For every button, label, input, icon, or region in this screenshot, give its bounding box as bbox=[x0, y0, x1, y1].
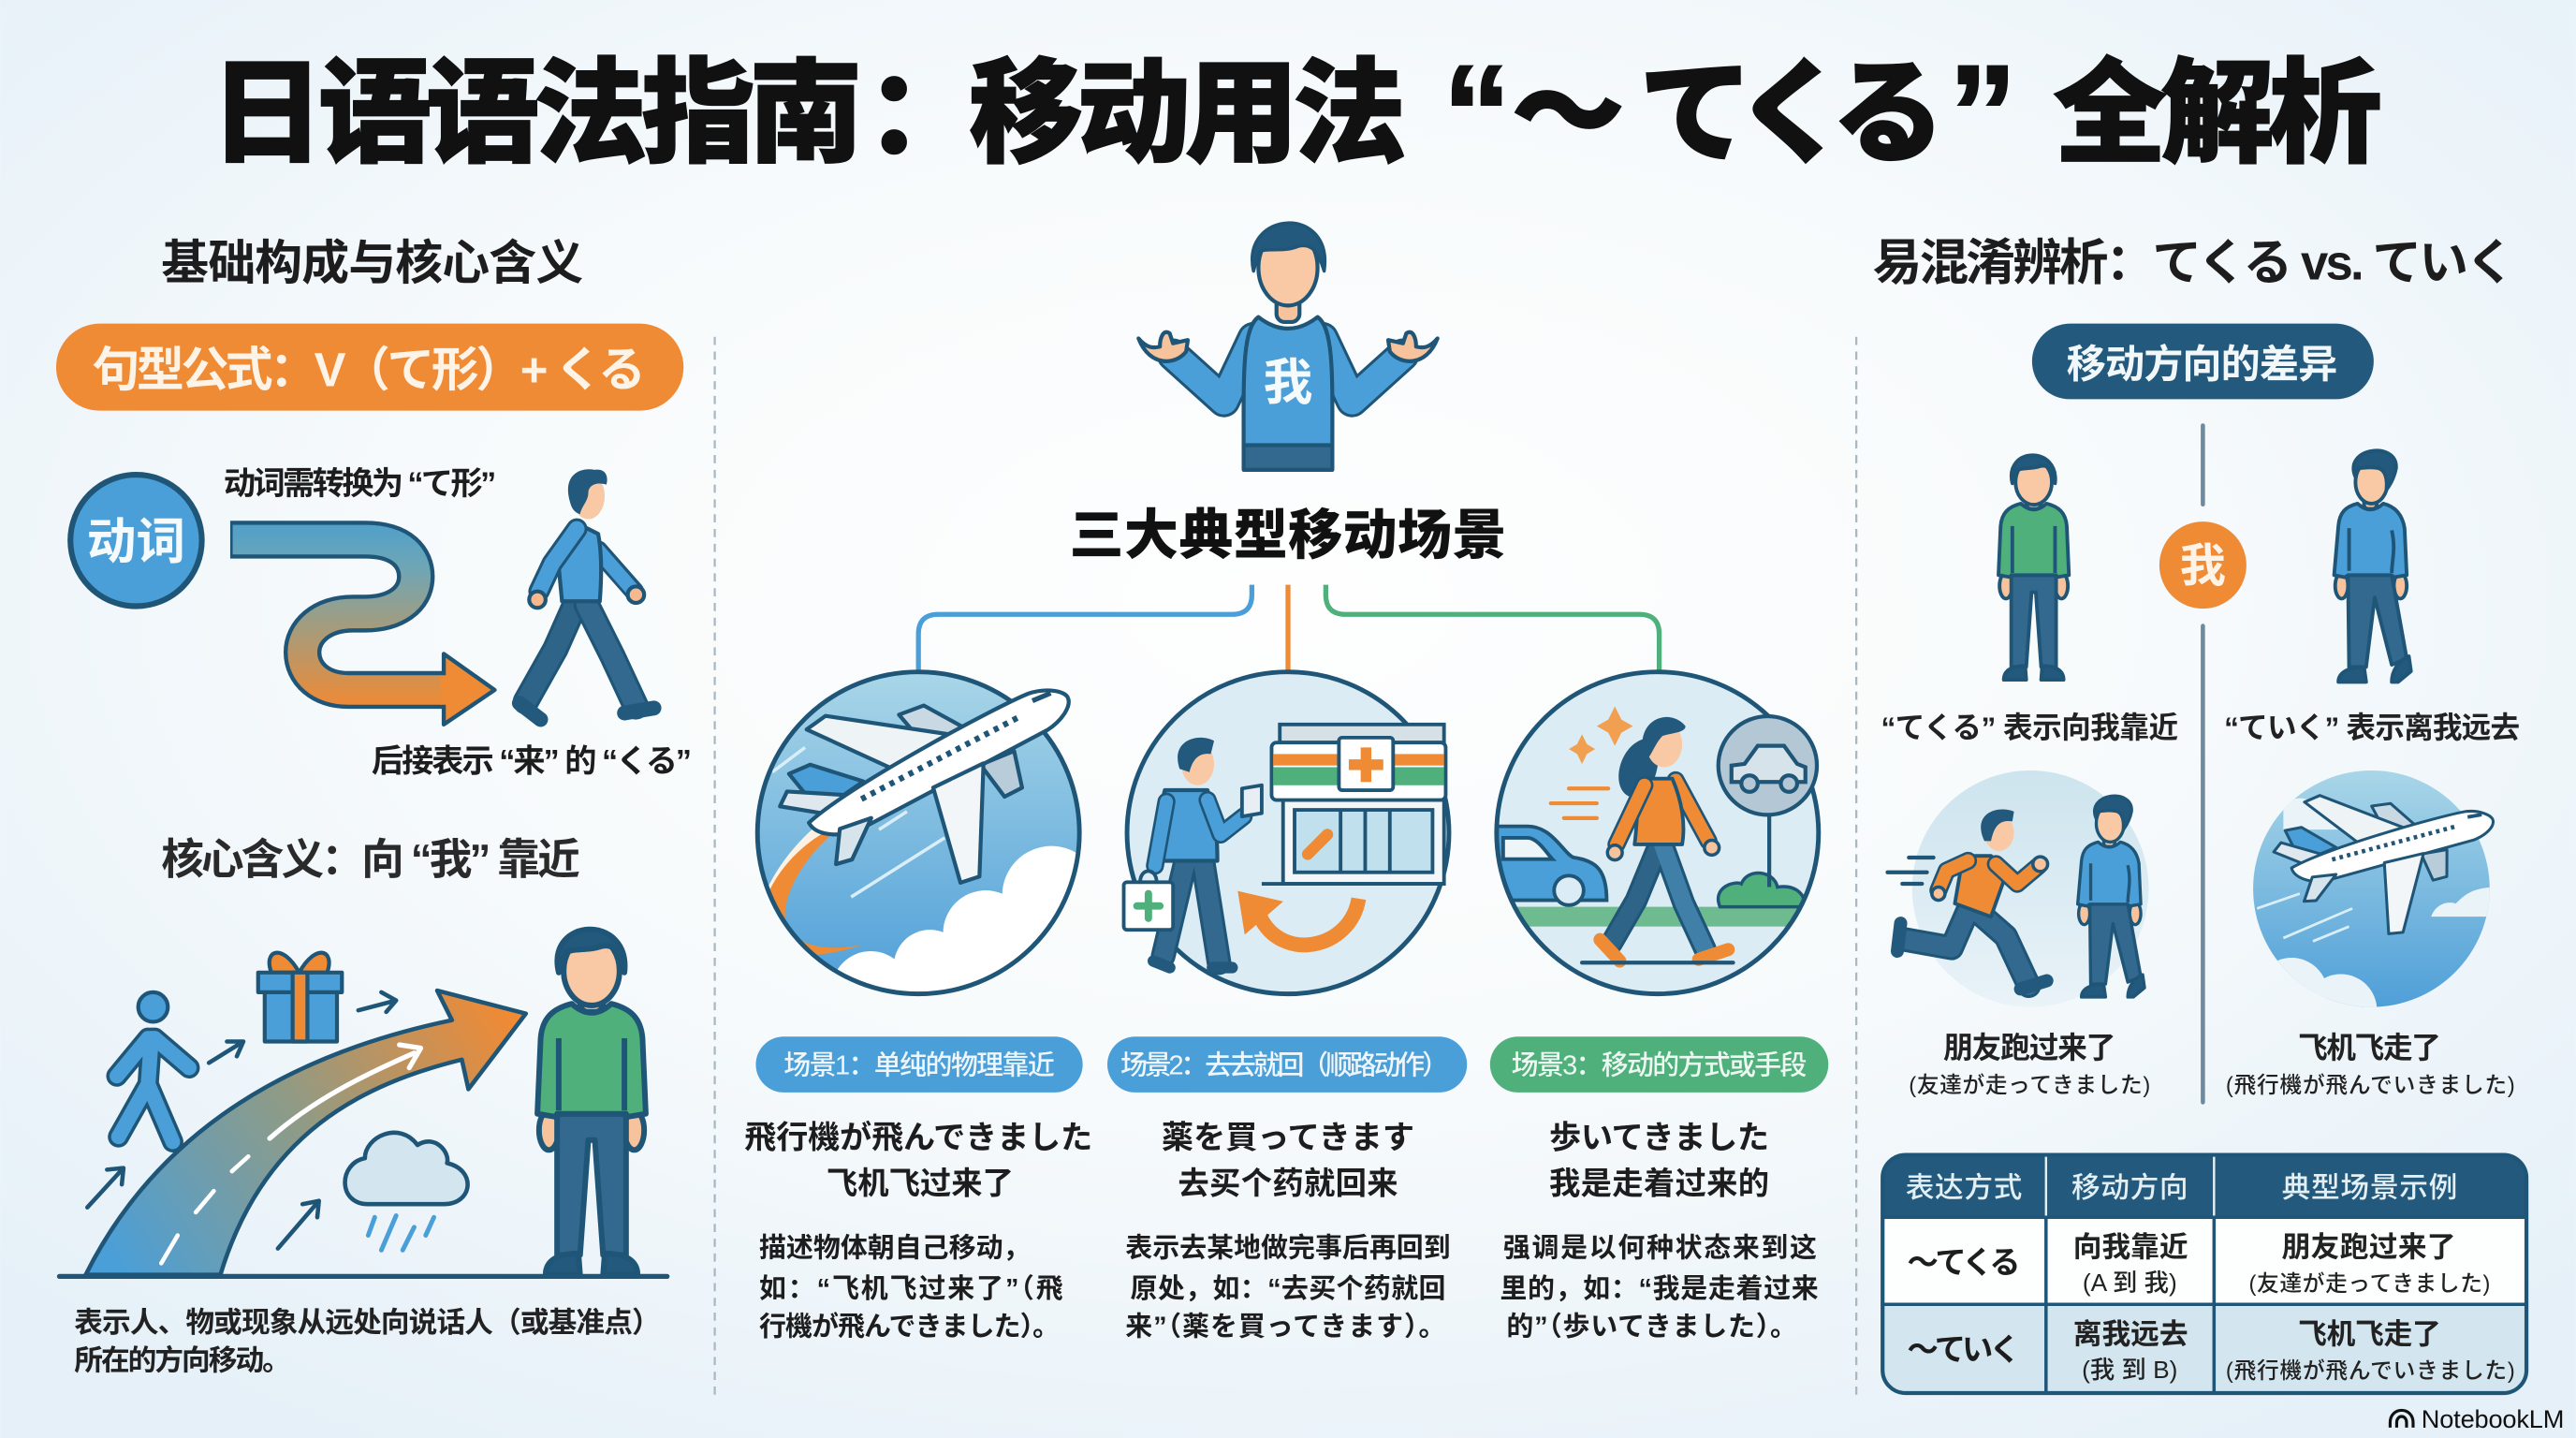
verb circle bbox=[70, 475, 202, 606]
store bbox=[1262, 725, 1445, 884]
friend running illustration bbox=[1887, 770, 2148, 1007]
panel: three scenes bbox=[744, 223, 1832, 1343]
label: followed by kuru: 后接表示 “来” 的 “くる” bbox=[372, 744, 692, 780]
scene 1 card bbox=[744, 1036, 1092, 1343]
scene 2 card: 场景2：去去就回（顺路动作） bbox=[1120, 1051, 1449, 1081]
man with phone and bag bbox=[1124, 738, 1262, 968]
return arrow bbox=[1238, 892, 1358, 945]
table row: te-iku: ～ていく bbox=[1908, 1333, 2021, 1368]
core meaning description: 表示人、物或现象从远处向说话人（或基准点） bbox=[74, 1306, 661, 1339]
sentence: plane flew away: (飛行機が飛んでいきました) bbox=[2226, 1073, 2515, 1098]
me circle bbox=[2159, 521, 2247, 609]
title: ” bbox=[1948, 37, 2017, 191]
person in green bbox=[537, 930, 646, 1275]
table row: te-iku: (我 到 B) bbox=[2082, 1356, 2177, 1384]
scene 3 illustration: woman walking bbox=[1486, 672, 1832, 994]
sentence: plane flew away: 飞机飞走了 bbox=[2298, 1031, 2441, 1064]
title: てくる bbox=[1640, 50, 1945, 177]
car bbox=[1486, 827, 1606, 905]
table row: te-kuru: ～てくる bbox=[1908, 1246, 2021, 1281]
heading: basic structure: 基础构成与核心含义 bbox=[161, 236, 583, 289]
table header: 表达方式 bbox=[1906, 1171, 2022, 1204]
core meaning description: 所在的方向移动。 bbox=[74, 1343, 291, 1376]
direction pill: 移动方向的差异 bbox=[2067, 343, 2337, 387]
heading: core meaning: 核心含义：向 “我” 靠近 bbox=[161, 836, 580, 884]
road sign bbox=[1719, 716, 1817, 888]
table header bbox=[1906, 1171, 2457, 1204]
sentence: friend ran over: (友達が走ってきました) bbox=[1909, 1073, 2150, 1098]
title: ： bbox=[866, 50, 979, 177]
verb circle: 动词 bbox=[87, 515, 185, 570]
direction pill bbox=[2032, 324, 2374, 399]
woman bbox=[1582, 717, 1734, 962]
title: 日语语法指南 bbox=[211, 50, 863, 177]
panel: te-kuru versus te-iku bbox=[1873, 235, 2526, 1393]
scene 1 illustration: airplane bbox=[754, 669, 1082, 996]
scene 1 card: 行機が飛んできました）。 bbox=[759, 1312, 1060, 1343]
comparison table bbox=[1882, 1155, 2526, 1393]
person approaching bbox=[1998, 455, 2069, 680]
table row: te-iku: (飛行機が飛んでいきました) bbox=[2226, 1358, 2515, 1384]
title bbox=[211, 37, 2382, 191]
formula pill: 句型公式：V（て形）+ くる bbox=[93, 343, 646, 396]
me circle: 我 bbox=[2180, 541, 2226, 592]
scene 1 card: 场景1：单纯的物理靠近 bbox=[783, 1051, 1055, 1081]
formula pill bbox=[56, 324, 683, 411]
table row: te-kuru: (友達が走ってきました) bbox=[2249, 1271, 2490, 1297]
table row: te-kuru: 朋友跑过来了 bbox=[2282, 1230, 2456, 1263]
scene 2 card: 薬を買ってきます bbox=[1162, 1121, 1414, 1156]
table row: te-iku: 离我远去 bbox=[2073, 1317, 2188, 1350]
table row: te-iku bbox=[1908, 1317, 2515, 1384]
title: 移动用法 bbox=[970, 50, 1406, 177]
scene 1 card: 如：“飞机飞过来了”（飛 bbox=[759, 1274, 1063, 1304]
scene 1 card: 描述物体朝自己移动， bbox=[759, 1233, 1031, 1263]
panel: basic structure and core meaning bbox=[56, 236, 692, 1376]
title: “ bbox=[1442, 37, 1512, 191]
scene 3 card: 的”（歩いてきました）。 bbox=[1506, 1313, 1797, 1343]
table row: te-kuru: (A 到 我) bbox=[2083, 1269, 2177, 1297]
core meaning description bbox=[74, 1306, 661, 1376]
heading: comparison: 易混淆辨析：てくる vs. ていく bbox=[1873, 235, 2515, 290]
scene 2 card: 来”（薬を買ってきます）。 bbox=[1125, 1313, 1445, 1343]
table header: 移动方向 bbox=[2071, 1171, 2188, 1204]
table row: te-kuru bbox=[1908, 1230, 2490, 1297]
title: 全解析 bbox=[2054, 50, 2382, 177]
speaker figure: 我 bbox=[1264, 355, 1312, 410]
caption: te-kuru: “てくる” 表示向我靠近 bbox=[1881, 711, 2178, 744]
table row: te-kuru: 向我靠近 bbox=[2073, 1230, 2188, 1263]
plane leaving illustration bbox=[2253, 770, 2495, 1007]
scene 3 card: 歩いてきました bbox=[1549, 1121, 1769, 1156]
table header: 典型场景示例 bbox=[2282, 1171, 2457, 1204]
label: convert verb: 动词需转换为 “て形” bbox=[224, 466, 496, 502]
big approach arrow bbox=[86, 990, 526, 1275]
scene 1 card: 飞机飞过来了 bbox=[827, 1167, 1014, 1202]
connector: orange bbox=[1286, 585, 1290, 672]
walking person bbox=[520, 469, 654, 720]
sparkles and speed lines bbox=[1551, 707, 1632, 818]
person leaving bbox=[2334, 450, 2411, 682]
NotebookLM logo: NotebookLM bbox=[2422, 1404, 2564, 1433]
scene 3 card: 强调是以何种状态来到这 bbox=[1503, 1233, 1817, 1263]
sentence: friend ran over bbox=[1909, 1031, 2150, 1098]
connector: blue bbox=[918, 585, 1251, 672]
scene 2 card: 去买个药就回来 bbox=[1178, 1167, 1398, 1202]
icon: small arrows bbox=[87, 992, 396, 1249]
scene 2 illustration: shop errand bbox=[1124, 672, 1449, 994]
table row: te-iku: 飞机飞走了 bbox=[2298, 1317, 2441, 1350]
icon: rain cloud bbox=[345, 1133, 468, 1250]
icon: small walking figure bbox=[117, 992, 189, 1142]
heading: three scenes: 三大典型移动场景 bbox=[1070, 506, 1506, 565]
scene 2 card bbox=[1107, 1036, 1467, 1343]
caption: te-iku: “ていく” 表示离我远去 bbox=[2224, 711, 2520, 744]
scene 3 card bbox=[1490, 1036, 1828, 1343]
connector: green bbox=[1325, 585, 1660, 672]
sentence: friend ran over: 朋友跑过来了 bbox=[1943, 1031, 2115, 1064]
S-shaped arrow bbox=[230, 539, 494, 725]
scene 2 card: 表示去某地做完事后再回到 bbox=[1125, 1233, 1451, 1263]
scene 1 card: 飛行機が飛んできました bbox=[744, 1120, 1092, 1156]
sentence: plane flew away bbox=[2226, 1031, 2515, 1098]
speaker figure bbox=[1138, 223, 1438, 470]
scene 2 card: 原处，如：“去买个药就回 bbox=[1131, 1274, 1445, 1304]
scene 3 card: 我是走着过来的 bbox=[1549, 1167, 1769, 1202]
icon: gift box bbox=[258, 953, 342, 1041]
scene 3 card: 里的，如：“我是走着过来 bbox=[1500, 1274, 1819, 1304]
title: ～ bbox=[1512, 50, 1625, 177]
scene 3 card: 场景3：移动的方式或手段 bbox=[1512, 1051, 1807, 1081]
